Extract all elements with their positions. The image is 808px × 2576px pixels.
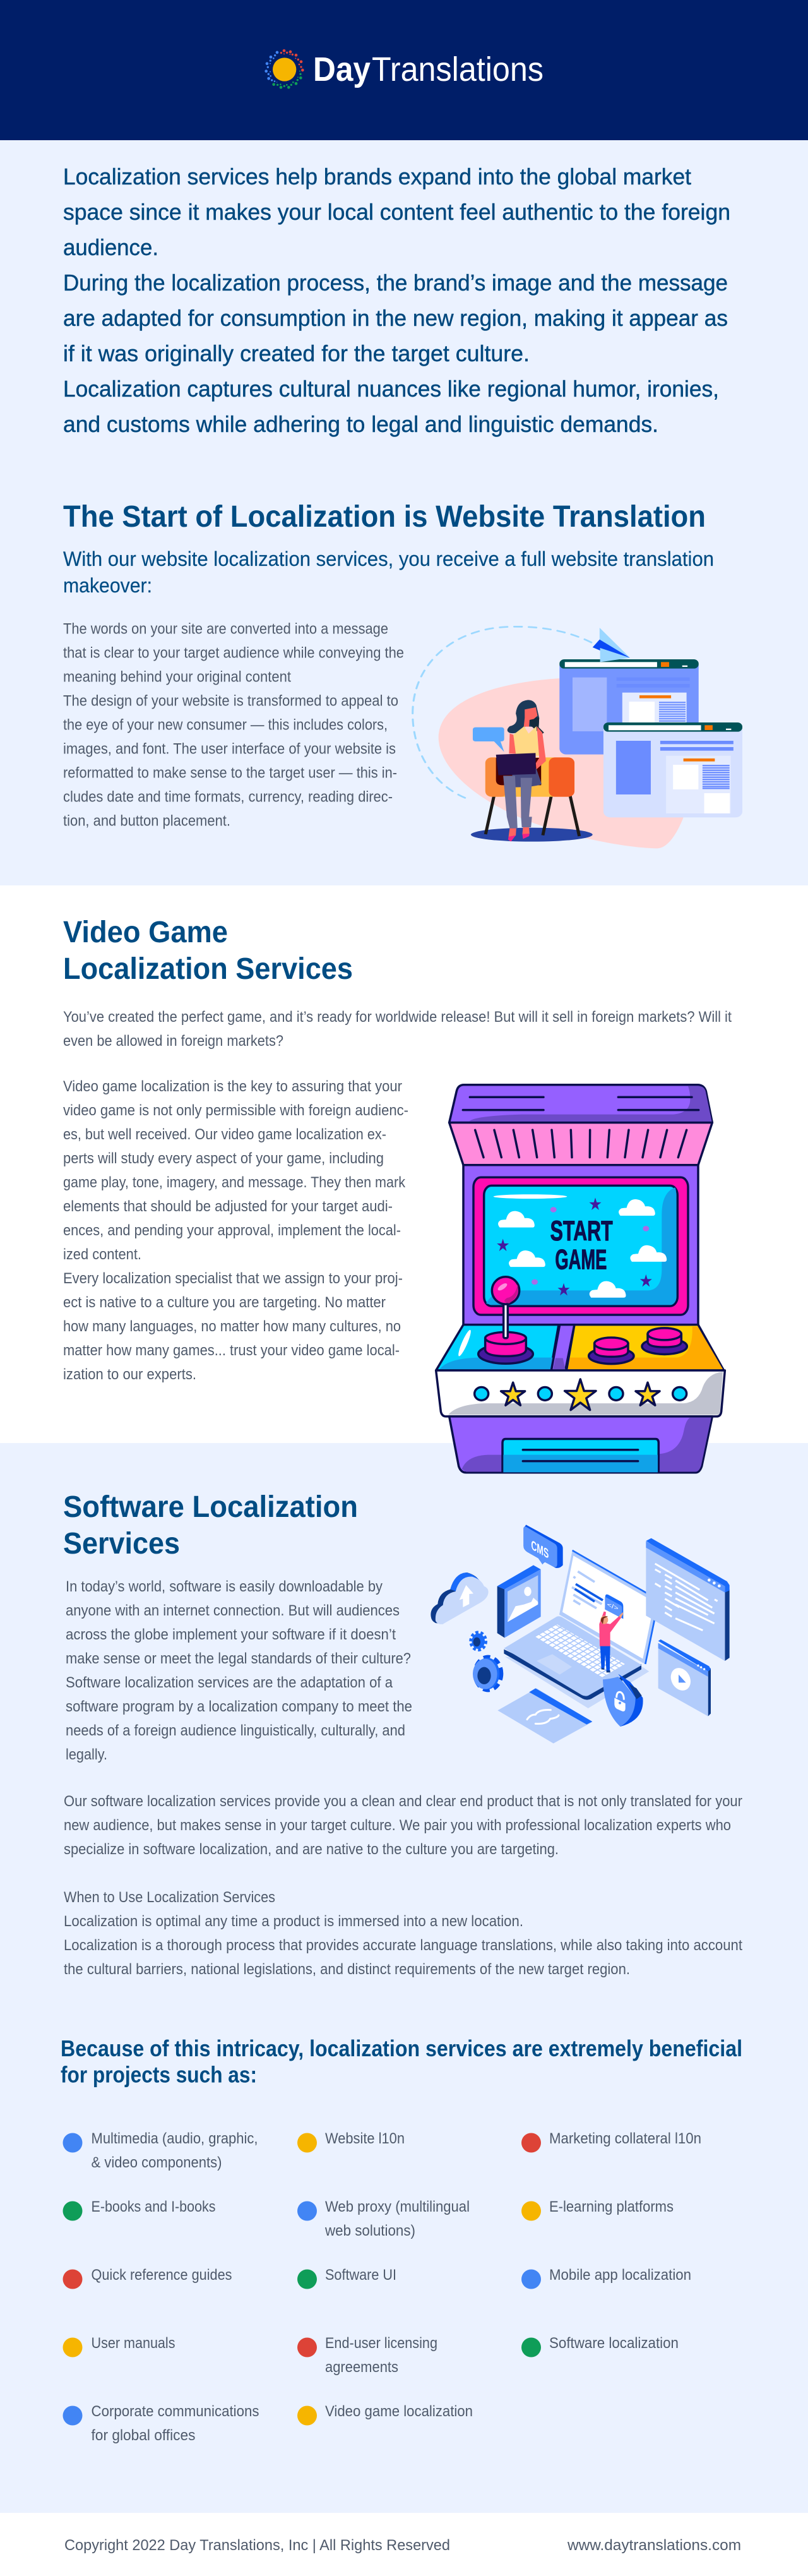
- heading: projects list: [61, 2035, 742, 2088]
- body text: video game details: perts will study every aspect of your game, including: [63, 1150, 384, 1167]
- heading: video game: Localization Services: [63, 952, 353, 986]
- project bullet list: [63, 2130, 701, 2444]
- item: e-learning: [521, 2198, 674, 2220]
- body text: website translation: reformatted to make sense to the target user — this in-: [63, 764, 397, 782]
- intro text: audience.: [63, 234, 158, 260]
- item: multimedia: Multimedia (audio, graphic,: [91, 2130, 258, 2147]
- body text: video game details: ized content.: [63, 1246, 141, 1263]
- item: video game: [297, 2403, 473, 2425]
- arcade base: [449, 1417, 712, 1473]
- heading: video game: [63, 916, 353, 986]
- body text: software intro: [66, 1578, 412, 1763]
- body text: website translation: tion, and button placement.: [63, 812, 230, 830]
- body text: software intro: Software localization services are the adaptation of a: [66, 1674, 393, 1691]
- item: software UI: [297, 2267, 396, 2289]
- item: end-user licensing: agreements: [325, 2359, 398, 2376]
- body text: video game details: ect is native to a culture you are targeting. No matter: [63, 1294, 386, 1311]
- body text: software services: specialize in software localization, and are native to the culture you are targeting.: [64, 1841, 559, 1858]
- body text: video game lead: even be allowed in foreign markets?: [63, 1033, 283, 1050]
- subheading: website translation: [63, 548, 714, 597]
- body text: software intro: across the globe implement your software if it doesn’t: [66, 1626, 396, 1643]
- item: corporate communications: Corporate communications: [91, 2403, 259, 2420]
- intro text: Localization captures cultural nuances like regional humor, ironies,: [63, 376, 719, 402]
- logo sun icon: [264, 49, 304, 89]
- intro text: are adapted for consumption in the new region, making it appear as: [63, 305, 728, 331]
- laptop: [504, 1550, 658, 1708]
- intro text: Localization services help brands expand into the global market: [63, 164, 691, 189]
- body text: video game details: Video game localization is the key to assuring that your: [63, 1078, 402, 1095]
- item: e-books: E-books and I-books: [91, 2198, 216, 2215]
- person holding code tile: [599, 1595, 623, 1672]
- illustration: arcade machine: [436, 1085, 725, 1473]
- copyright text: Copyright 2022 Day Translations, Inc | All Rights Reserved: [64, 2537, 450, 2554]
- web page front: [603, 722, 742, 817]
- item: end-user licensing: End-user licensing: [325, 2335, 437, 2352]
- body text: video game details: ences, and pending your approval, implement the local-: [63, 1222, 401, 1239]
- body text: website translation: The design of your website is transformed to appeal to: [63, 692, 398, 710]
- arcade screen: [473, 1177, 688, 1315]
- arcade cabinet body: [463, 1165, 698, 1325]
- body text: when to use: Localization is a thorough process that provides accurate language translations, while also taking into account: [64, 1937, 742, 1954]
- arcade control deck: [436, 1325, 724, 1370]
- body text: video game details: elements that should be adjusted for your target audi-: [63, 1198, 393, 1215]
- body text: software intro: software program by a localization company to meet the: [66, 1698, 412, 1715]
- item: e-books: [63, 2198, 216, 2220]
- person holding code tile: </>: [607, 1602, 619, 1612]
- subheading: website translation: makeover:: [63, 574, 152, 597]
- body text: software services: [64, 1793, 742, 1858]
- body text: website translation: meaning behind your original content: [63, 668, 291, 686]
- body text: software services: new audience, but makes sense in your target culture. We pair you with professional localization experts who: [64, 1817, 731, 1834]
- shield with lock: [603, 1674, 643, 1727]
- item: web proxy: [297, 2198, 470, 2239]
- heading: software localization: [63, 1490, 358, 1561]
- body text: when to use: the cultural barriers, national legislations, and distinct requirements of the new target region.: [64, 1961, 630, 1978]
- body text: video game details: Every localization specialist that we assign to your proj-: [63, 1270, 403, 1287]
- web page back: [559, 659, 699, 755]
- body text: when to use: Localization is optimal any time a product is immersed into a new location.: [64, 1913, 523, 1930]
- body text: website translation: that is clear to your target audience while conveying the: [63, 644, 404, 662]
- heading: software localization: Services: [63, 1527, 180, 1561]
- body text: video game details: matter how many games... trust your video game local-: [63, 1342, 400, 1359]
- right code window: [646, 1538, 730, 1661]
- body text: website translation: [63, 620, 404, 830]
- image tile: [497, 1565, 541, 1638]
- body text: software intro: needs of a foreign audience linguistically, culturally, and: [66, 1722, 405, 1739]
- body text: software services: Our software localization services provide you a clean and clear end product that is not only translated for your: [64, 1793, 742, 1810]
- arcade buttons: [589, 1328, 687, 1364]
- arcade pink vent: [449, 1123, 712, 1165]
- item: software UI: Software UI: [325, 2267, 396, 2284]
- item: software localization: [521, 2335, 679, 2357]
- body text: website translation: the eye of your new consumer — this includes colors,: [63, 716, 388, 734]
- body text: video game details: ization to our experts.: [63, 1366, 196, 1383]
- item: web proxy: web solutions): [324, 2222, 415, 2239]
- braces card: [497, 1688, 592, 1744]
- item: software localization: Software localization: [549, 2335, 679, 2352]
- body text: video game details: [63, 1078, 408, 1383]
- gears: [471, 1632, 501, 1689]
- body text: software intro: In today’s world, software is easily downloadable by: [66, 1578, 383, 1595]
- speech bubble: [473, 728, 504, 752]
- woman on chair: [471, 700, 593, 842]
- item: corporate communications: [63, 2403, 259, 2444]
- body text: software intro: make sense or meet the legal standards of their culture?: [66, 1650, 411, 1667]
- heading: projects list: Because of this intricacy, localization services are extremely beneficial: [61, 2035, 742, 2061]
- heading: projects list: for projects such as:: [61, 2061, 257, 2088]
- item: end-user licensing: [297, 2335, 437, 2376]
- screen text: [550, 1216, 613, 1276]
- illustration: isometric software laptop: [431, 1525, 730, 1744]
- item: website: [297, 2130, 405, 2152]
- intro text: During the localization process, the brand’s image and the message: [63, 270, 728, 296]
- item: e-learning: E-learning platforms: [549, 2198, 674, 2215]
- body text: video game details: game play, tone, imagery, and message. They then mark: [63, 1174, 406, 1191]
- panel: video game localization: [0, 885, 808, 1443]
- illustration: woman with laptop and web pages: [413, 626, 742, 848]
- intro text: if it was originally created for the target culture.: [63, 340, 530, 366]
- item: user manuals: [63, 2335, 175, 2357]
- heading: website translation: The Start of Localization is Website Translation: [63, 500, 706, 534]
- item: quick reference: [63, 2267, 232, 2289]
- joystick: [478, 1277, 533, 1363]
- body text: website translation: images, and font. The user interface of your website is: [63, 740, 396, 758]
- item: multimedia: [63, 2130, 258, 2171]
- item: web proxy: Web proxy (multilingual: [325, 2198, 470, 2215]
- body text: video game lead: [63, 1009, 732, 1050]
- body text: video game details: es, but well received. Our video game localization ex-: [63, 1126, 386, 1143]
- body text: website translation: cludes date and time formats, currency, reading direc-: [63, 788, 393, 806]
- body text: software intro: anyone with an internet connection. But will audiences: [66, 1602, 400, 1619]
- item: mobile app: [521, 2267, 691, 2289]
- header band: [0, 0, 808, 140]
- heading: video game: Video Game: [63, 916, 228, 949]
- body text: when to use: [64, 1889, 742, 1978]
- screen text: GAME: [555, 1244, 607, 1276]
- paper plane: [593, 628, 630, 662]
- logo wordmark: Day: [313, 51, 371, 88]
- item: video game: Video game localization: [325, 2403, 473, 2420]
- item: multimedia: & video components): [91, 2154, 222, 2171]
- item: corporate communications: for global offices: [91, 2427, 196, 2444]
- body text: video game details: how many languages, no matter how many cultures, no: [63, 1318, 401, 1335]
- intro text: space since it makes your local content feel authentic to the foreign: [63, 199, 730, 225]
- CMS speech bubble: CMS: [531, 1537, 549, 1562]
- video window: [658, 1639, 711, 1716]
- body text: when to use: When to Use Localization Services: [64, 1889, 275, 1906]
- subheading: website translation: With our website localization services, you receive a full website translation: [63, 548, 714, 570]
- panel: software localization: [0, 1443, 808, 2513]
- item: marketing: Marketing collateral l10n: [549, 2130, 701, 2147]
- logo wordmark: Translations: [372, 51, 544, 88]
- item: quick reference: Quick reference guides: [91, 2267, 232, 2284]
- intro text: [63, 164, 730, 437]
- arcade marquee top: [449, 1085, 712, 1123]
- heading: software localization: Software Localization: [63, 1490, 358, 1524]
- item: user manuals: User manuals: [91, 2335, 175, 2352]
- intro text: and customs while adhering to legal and linguistic demands.: [63, 411, 658, 437]
- body text: software intro: legally.: [66, 1746, 107, 1763]
- cloud upload icon: [431, 1573, 489, 1624]
- item: marketing: [521, 2130, 701, 2152]
- body text: website translation: The words on your site are converted into a message: [63, 620, 388, 638]
- body text: video game details: video game is not only permissible with foreign audienc-: [63, 1102, 408, 1119]
- screen text: START: [550, 1216, 613, 1247]
- item: mobile app: Mobile app localization: [549, 2267, 691, 2284]
- logo: [264, 49, 544, 89]
- website url: www.daytranslations.com: [567, 2537, 741, 2554]
- body text: video game lead: You’ve created the perfect game, and it’s ready for worldwide release! But will it sell in foreign markets? Will it: [63, 1009, 732, 1026]
- arcade white score strip: [436, 1370, 725, 1417]
- item: website: Website l10n: [325, 2130, 405, 2147]
- footer: [0, 2513, 808, 2576]
- CMS speech bubble: [523, 1525, 563, 1568]
